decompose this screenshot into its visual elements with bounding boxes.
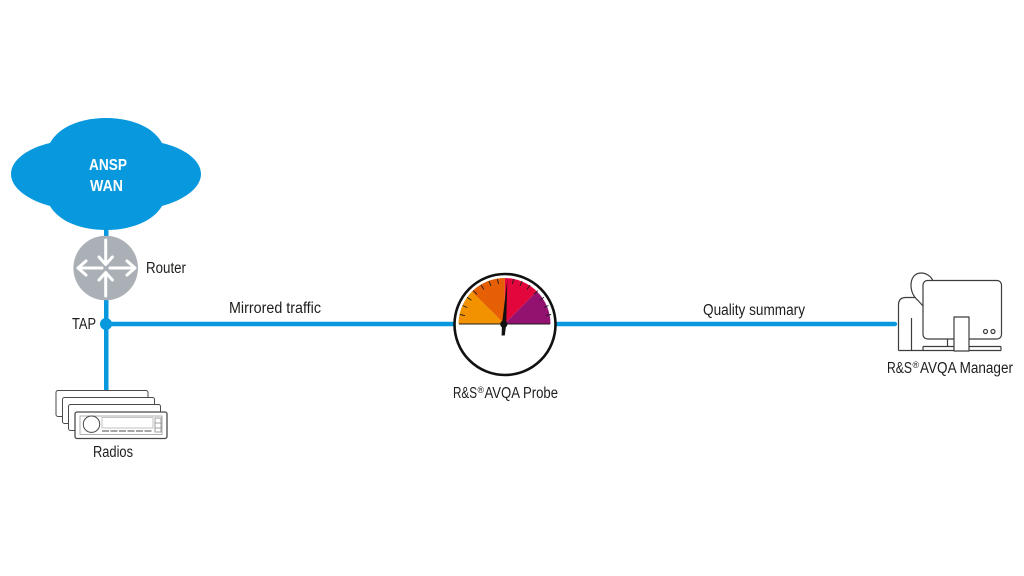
gauge segment: red [504,278,536,322]
label: R&S AVQA Probe [453,385,558,402]
label: R&S AVQA Manager: ® [912,360,919,370]
cloud: ANSP WAN: WAN [90,178,123,195]
label: R&S AVQA Manager: AVQA Manager [920,360,1013,377]
icon: router [73,236,138,300]
label: R&S AVQA Manager: R&S [887,360,912,377]
label: R&S AVQA Probe: AVQA Probe [484,385,558,402]
arrow: mirrored traffic and quality summary line [106,322,897,326]
gauge segment: yellow orange [458,292,502,324]
label: Mirrored traffic: Mirrored traffic [229,300,321,317]
icon: manager workstation [898,273,1002,351]
label: Router: Router [146,260,186,277]
gauge needle [502,280,507,336]
label: TAP: TAP [72,316,96,333]
cloud: ANSP WAN: ANSP [89,157,127,174]
label: R&S AVQA Probe: ® [478,385,484,395]
icon: radios [56,390,167,438]
label: R&S AVQA Manager [887,360,1013,377]
gauge segment: purple [506,292,550,324]
network diagram [11,118,1013,457]
label: Quality summary: Quality summary [703,302,805,319]
label: Radios: Radios [93,444,133,461]
cloud: ANSP WAN [11,118,201,230]
gauge segment: orange [472,278,505,322]
label: R&S AVQA Probe: R&S [453,385,477,402]
gauge ticks [459,279,551,324]
TAP node [100,318,112,330]
vertical connection line [104,225,108,390]
icon: probe gauge [450,270,558,375]
